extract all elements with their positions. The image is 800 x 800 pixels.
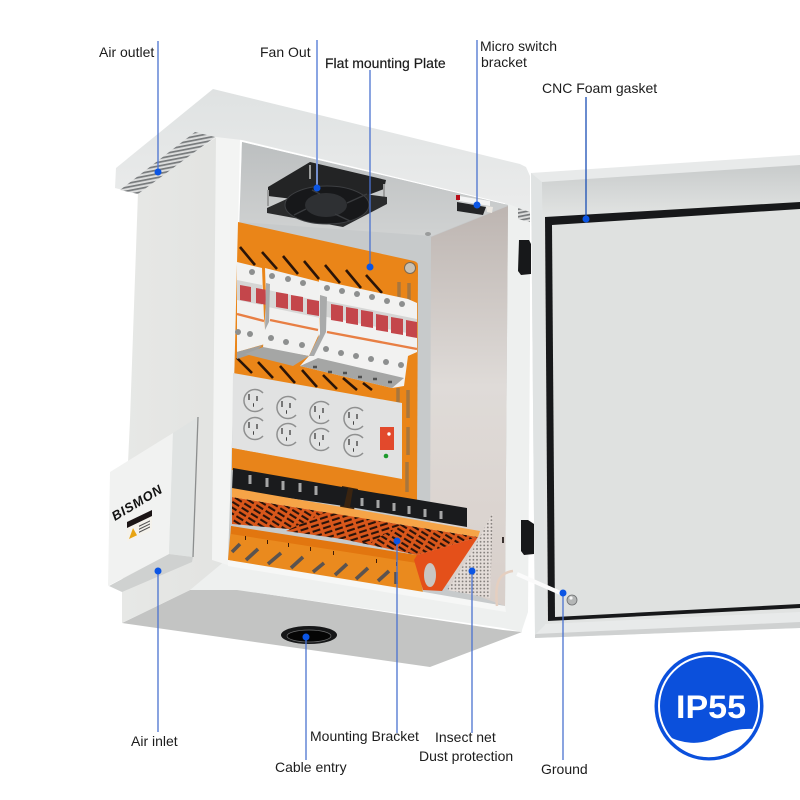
screw highlight xyxy=(569,596,573,600)
fan xyxy=(267,162,387,227)
hub xyxy=(305,193,347,217)
door recess xyxy=(542,165,800,624)
standoffs xyxy=(268,165,384,206)
hinge upper xyxy=(518,240,531,275)
warning label xyxy=(127,510,152,542)
hood front xyxy=(108,433,173,586)
hood side xyxy=(169,417,198,557)
vent hood xyxy=(108,417,198,592)
brand name: BISMON xyxy=(109,481,165,524)
roof xyxy=(115,89,530,212)
IP55 badge xyxy=(654,652,764,760)
badge outer xyxy=(654,652,764,760)
mesh left xyxy=(232,497,478,555)
callout: Fan Out xyxy=(260,40,320,192)
air outlet vent xyxy=(120,132,215,194)
switch plunger xyxy=(486,206,493,213)
hinge lower xyxy=(521,520,534,555)
outlets xyxy=(244,390,363,457)
outlet ground holes xyxy=(253,405,354,450)
outlet slots xyxy=(249,394,357,446)
left terminal strip xyxy=(232,468,348,506)
red marker xyxy=(456,195,460,200)
callout: Flat mounting Plate xyxy=(325,55,446,270)
cable gland xyxy=(369,476,387,486)
cable xyxy=(496,571,513,606)
callout: Ground: Ground xyxy=(541,761,588,777)
enclosure interior xyxy=(228,142,508,608)
switch block xyxy=(457,202,486,215)
terminal clips xyxy=(250,475,441,519)
callout: Cable entry xyxy=(275,634,347,775)
callout: Ground xyxy=(541,590,588,777)
cable entry xyxy=(281,626,337,644)
breaker group 1 xyxy=(235,262,267,359)
mounting bracket xyxy=(228,488,480,598)
ceiling xyxy=(240,142,508,236)
lower plate xyxy=(228,526,424,598)
hood shadow xyxy=(109,554,193,592)
callout: Micro switch bracket xyxy=(474,38,557,208)
callout: Mounting Bracket: Mounting Bracket xyxy=(310,728,419,744)
callout: Air inlet: Air inlet xyxy=(131,733,178,749)
right terminal strip xyxy=(350,489,467,527)
badge wave xyxy=(669,729,753,757)
power outlet strip xyxy=(232,373,402,486)
callout: Cable entry: Cable entry xyxy=(275,759,347,775)
door lower shadow edge xyxy=(535,622,800,638)
plate screw xyxy=(404,262,416,274)
plate surface xyxy=(232,222,418,500)
ceiling screw xyxy=(425,232,431,236)
plate slots vertical xyxy=(397,282,409,492)
callout: CNC Foam gasket xyxy=(542,80,657,222)
left pillar xyxy=(212,136,240,566)
side hole xyxy=(502,537,504,543)
ground strap xyxy=(496,571,577,606)
rear plate xyxy=(268,162,386,205)
callout: CNC Foam gasket: CNC Foam gasket xyxy=(542,80,657,96)
power switch xyxy=(380,427,394,450)
switch strip xyxy=(459,196,490,206)
text: Dust protection: Dust protection xyxy=(419,748,513,764)
breaker group 2 xyxy=(245,268,320,366)
strap xyxy=(517,574,565,595)
rear vent sliver xyxy=(518,208,530,222)
lower slots xyxy=(232,544,396,584)
rotor ring xyxy=(285,186,369,224)
strip panel xyxy=(232,373,402,479)
gasket xyxy=(545,202,800,621)
orange rail xyxy=(232,448,402,496)
door left flange shade xyxy=(531,173,545,635)
flat mounting plate xyxy=(232,222,418,500)
callout: Air outlet xyxy=(99,41,162,176)
enclosure body xyxy=(115,89,534,667)
callout: Fan Out: Fan Out xyxy=(260,44,311,60)
right frame xyxy=(503,178,530,630)
callout: Micro switch bracket: bracket xyxy=(481,54,527,70)
callout: Air inlet xyxy=(131,568,178,749)
callout: Air outlet: Air outlet xyxy=(99,44,154,60)
badge text: IP55 xyxy=(676,689,746,725)
bracket side xyxy=(414,537,478,591)
insect net xyxy=(447,512,493,598)
grommet rim xyxy=(281,626,337,644)
opening lower ledge xyxy=(228,560,506,612)
top lip xyxy=(232,488,480,537)
left side face xyxy=(122,136,228,623)
mesh centre xyxy=(286,510,400,543)
back wall xyxy=(228,142,508,608)
grommet inner xyxy=(287,630,331,642)
badge ring xyxy=(658,655,760,757)
badge inner xyxy=(660,657,758,755)
lower front band xyxy=(190,560,522,632)
right inner wall xyxy=(430,206,508,606)
callout: Insect net xyxy=(435,568,496,745)
rivet row xyxy=(245,538,397,564)
terminal strips xyxy=(232,448,467,527)
callout: Insect net: Insect net xyxy=(435,729,496,745)
side hole xyxy=(424,563,436,587)
switch mark xyxy=(387,432,391,436)
callout: Micro switch bracket: Micro switch xyxy=(480,38,557,54)
door xyxy=(531,155,800,638)
breaker group 3 xyxy=(300,280,417,388)
strip gap xyxy=(340,486,358,510)
circuit breakers xyxy=(235,262,417,388)
flange edge xyxy=(231,526,417,563)
hood edge xyxy=(193,417,198,557)
front plate xyxy=(267,187,387,227)
plate slots upper xyxy=(237,247,382,390)
blades xyxy=(294,190,367,221)
callout: Mounting Bracket xyxy=(310,538,419,744)
body underside xyxy=(122,590,522,667)
door outer frame xyxy=(531,155,800,638)
door panel xyxy=(552,209,800,617)
green LED xyxy=(384,454,388,458)
ground screw xyxy=(567,595,577,605)
micro switch bracket xyxy=(456,195,493,215)
callout: Flat mounting Plate: Flat mounting Plate xyxy=(325,55,446,71)
